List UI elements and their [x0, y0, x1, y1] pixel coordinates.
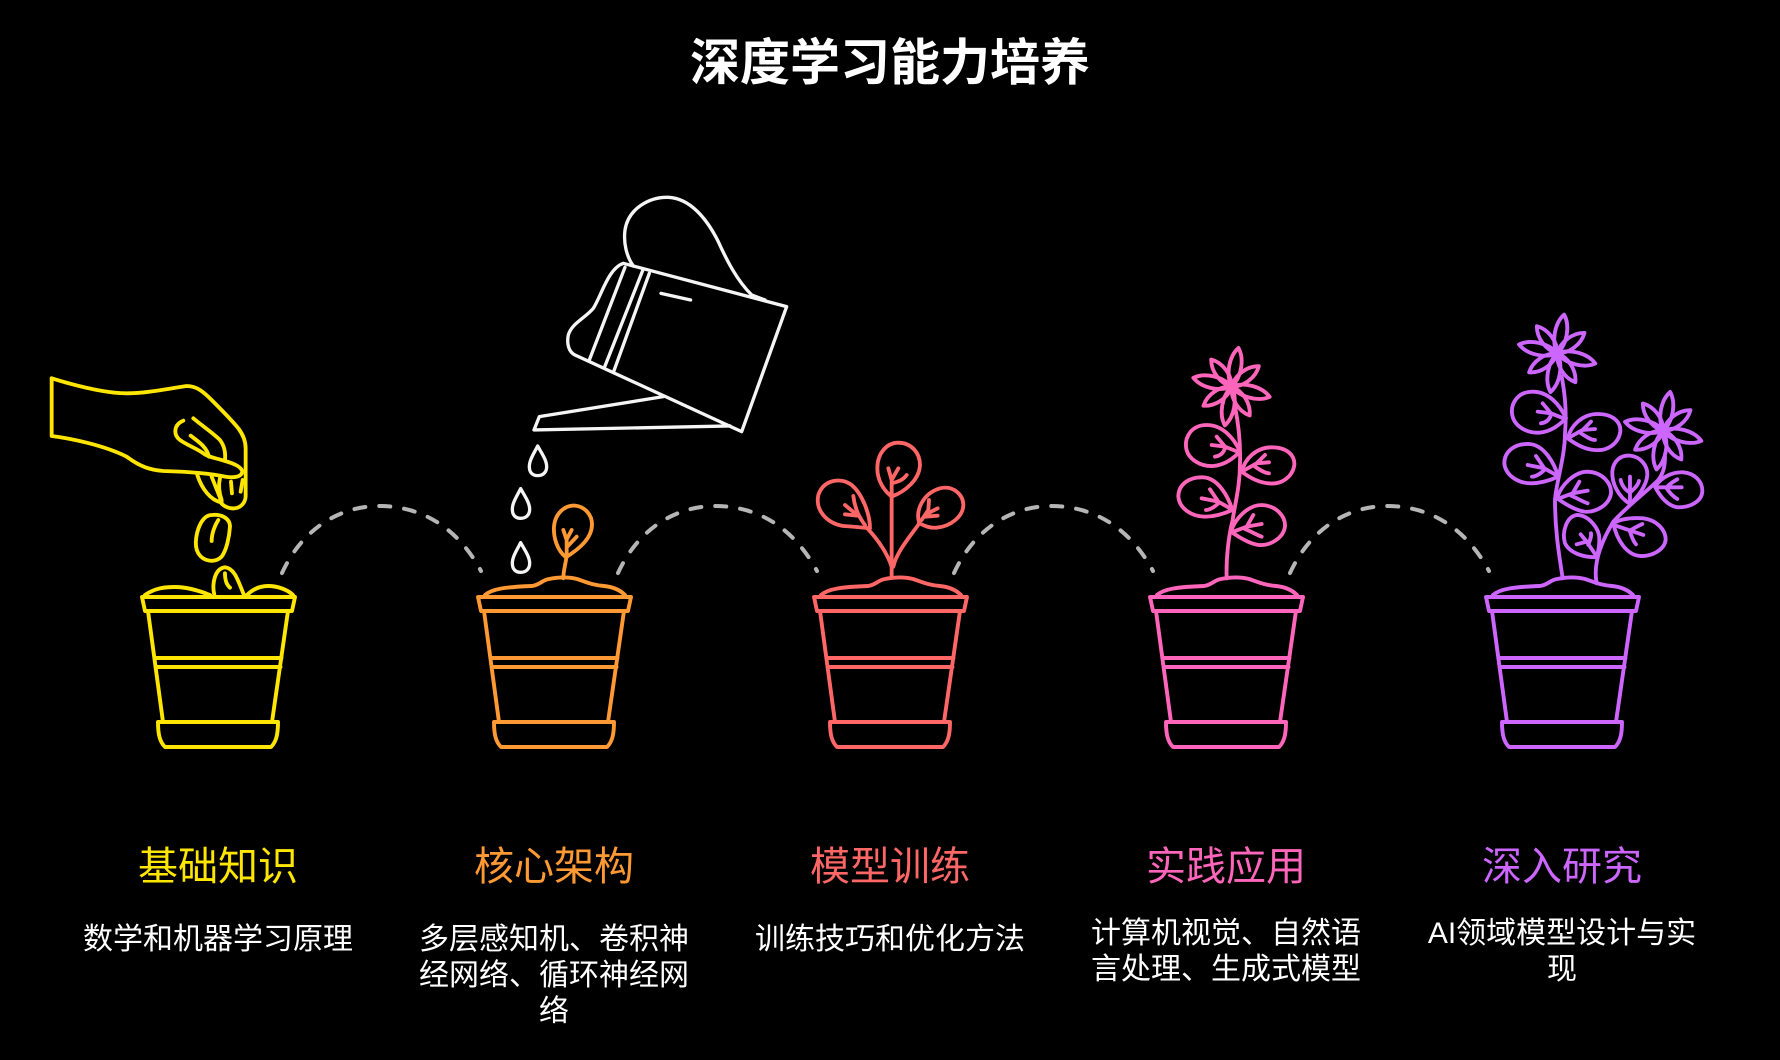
stage 4: pink flowering plant [1150, 347, 1303, 747]
icon: sprout [554, 506, 592, 578]
description: 深入研究: 现 [1547, 953, 1577, 986]
description: 核心架构: 络 [539, 995, 569, 1028]
stage 1: hand, seeds and yellow pot [52, 378, 295, 747]
description: 核心架构: 多层感知机、卷积神 [419, 923, 689, 956]
heading: 实践应用: 实践应用 [1146, 845, 1306, 889]
stage 2: watering can, drops and orange sprout [478, 197, 787, 747]
icon: seedling [818, 443, 963, 577]
description: 实践应用: 言处理、生成式模型 [1091, 953, 1361, 986]
heading: 核心架构: 核心架构 [474, 845, 634, 889]
stage 3: red three-leaf seedling [814, 443, 967, 747]
icon: hand dropping seeds [52, 378, 246, 508]
soil mounds [145, 586, 293, 595]
icon: large plant [1504, 314, 1703, 583]
description: 模型训练: 训练技巧和优化方法 [755, 923, 1025, 956]
pot 1 [142, 597, 295, 747]
dashed arc connectors [282, 506, 1489, 573]
icon: watering can [534, 197, 787, 432]
description: 深入研究: AI领域模型设计与实 [1428, 917, 1696, 950]
pot 4 [1150, 578, 1303, 747]
description: 基础知识: 数学和机器学习原理 [83, 923, 353, 956]
icon: flowering plant [1178, 347, 1294, 578]
heading: 深入研究: 深入研究 [1482, 845, 1642, 889]
icon: falling seed [196, 515, 230, 561]
icon: water drops [512, 446, 547, 572]
description: 核心架构: 经网络、循环神经网 [419, 959, 689, 992]
icon: seed in soil [213, 567, 244, 595]
description: 实践应用: 计算机视觉、自然语 [1091, 917, 1361, 950]
heading: 基础知识: 基础知识 [138, 845, 298, 889]
pot 3 [814, 578, 967, 747]
heading: 模型训练: 模型训练 [810, 845, 970, 889]
stage 5: purple two-flower plant [1486, 314, 1703, 747]
pot 2 [478, 578, 631, 747]
pot 5 [1486, 578, 1639, 747]
title: 深度学习能力培养 [690, 35, 1090, 91]
